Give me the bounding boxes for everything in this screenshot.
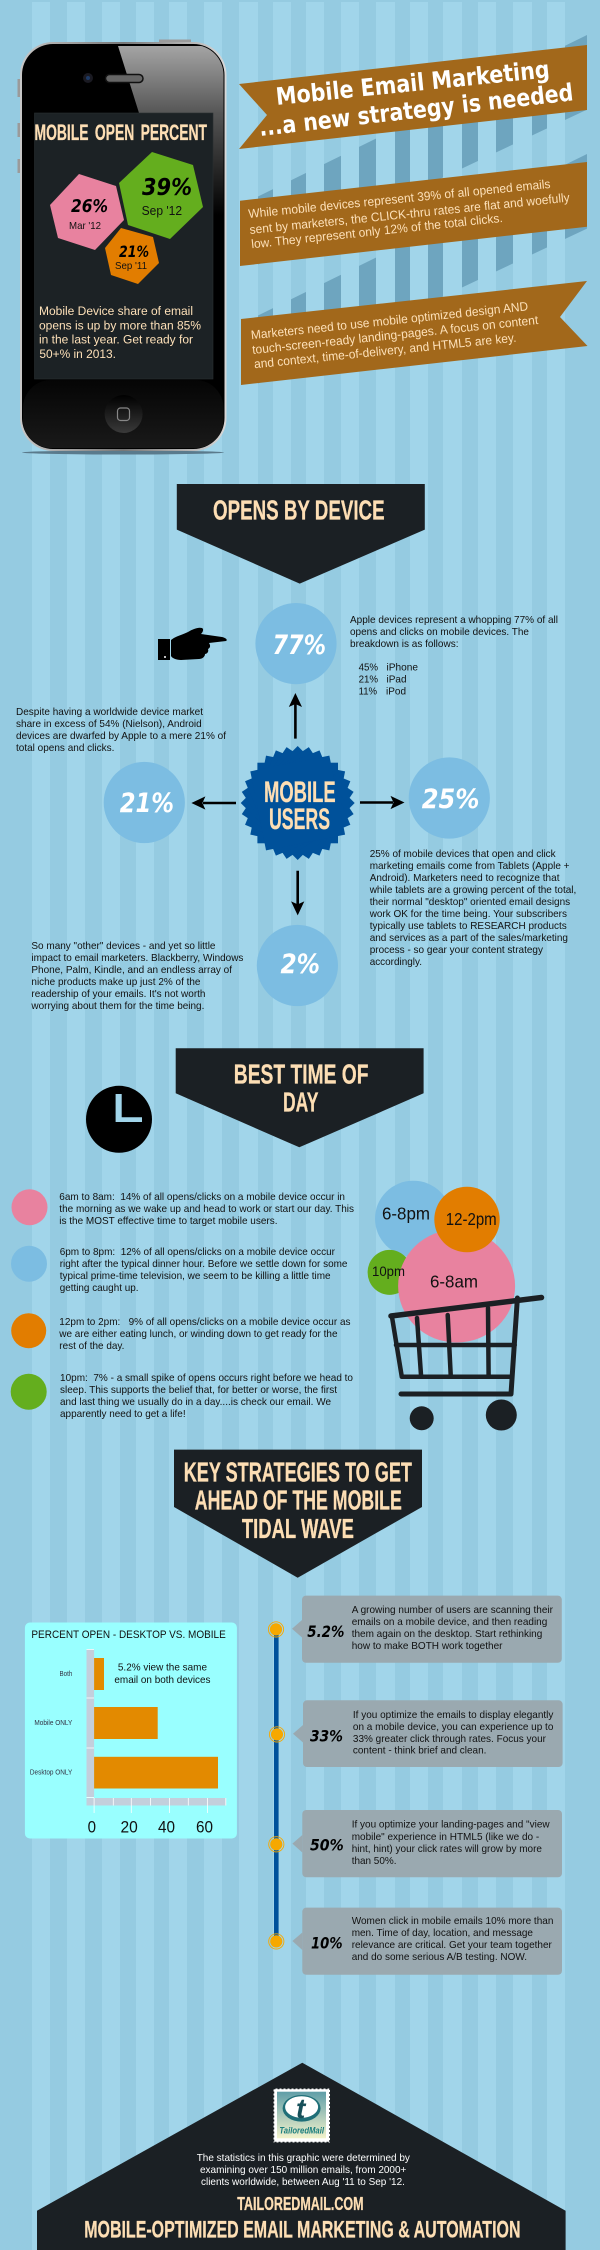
text: apple devices: 21% [359, 674, 378, 686]
bar labels: Desktop ONLY [30, 1770, 73, 1777]
stat circle: 2%: 2% [280, 949, 320, 980]
ribbon: title [239, 45, 587, 149]
text: apple devices: iPhone [386, 662, 418, 674]
text: other devices: niche products make up just 2% of the [31, 976, 201, 988]
hexagon: 21%: Sep '11 [115, 260, 147, 272]
axis numbers: 60 [196, 1819, 213, 1837]
heading: best time of day: BEST TIME OF [234, 1058, 368, 1089]
heading: key strategies [174, 1450, 422, 1578]
text: android: devices are dwarfed by Apple to a mere 21% of [16, 730, 226, 742]
badge: mobile users: USERS [269, 803, 330, 836]
callout: 33% [293, 1700, 563, 1767]
legend dot: 6-8pm [11, 1246, 47, 1282]
heading: best time of day [176, 1048, 424, 1147]
hexagon: 26%: Mar '12 [69, 220, 101, 232]
text: tablets: work OK for the time being. Your subscribers [369, 908, 567, 920]
text: apple devices: Apple devices represent a whopping 77% of all [350, 614, 558, 626]
stat circle: 25%: 25% [422, 784, 480, 815]
stat circle: 77% [255, 603, 337, 684]
hexagon: 21% [105, 228, 159, 284]
callout: 10%: men. Time of day, location, and message [352, 1927, 533, 1939]
callout: 10%: Women click in mobile emails 10% more than [352, 1915, 554, 1927]
callout: 5.2%: A growing number of users are scanning their [352, 1604, 553, 1616]
text: methodology [197, 2152, 411, 2188]
text: phone body copy: 50+% in 2013. [39, 347, 116, 361]
text: tablets: while tablets are a growing percent of the total, [369, 884, 576, 896]
ribbon: optimized design copy: Marketers need to use mobile optimized design AND [250, 299, 529, 342]
hexagon: 26% [50, 174, 124, 250]
callout: 33%: content - think brief and clean. [353, 1745, 486, 1757]
text: apple devices: opens and clicks on mobile devices. The [350, 626, 529, 638]
callout: 50%: than 50%. [352, 1855, 396, 1867]
text: methodology: The statistics in this graphic were determined by [197, 2152, 411, 2164]
text: apple devices: iPod [386, 686, 406, 698]
axis numbers: 0 [88, 1819, 96, 1837]
callout: 10% [292, 1908, 562, 1975]
callout: 33%: 33% [310, 1726, 343, 1745]
callout: 33%: If you optimize the emails to display elegantly [353, 1709, 554, 1721]
callout: 10%: and do some serious A/B testing. NOW. [352, 1951, 527, 1963]
icon: tailoredmail stamp: t [296, 2093, 307, 2124]
text: 10pm: apparently need to get a life! [60, 1408, 186, 1420]
text: other devices: So many "other" devices - and yet so little [31, 940, 216, 952]
ribbon shadows [257, 35, 587, 384]
hexagon: 26%: 26% [71, 197, 108, 217]
text: 6pm to 8pm: right after the typical dinner hour. Before we settle down for some [60, 1258, 348, 1270]
bubbles and shopping cart [368, 1181, 542, 1430]
text: tablets: accordingly. [370, 956, 422, 968]
callout: 5.2% [292, 1596, 562, 1663]
text: android: total opens and clicks. [16, 742, 114, 754]
axis numbers: 20 [120, 1819, 138, 1837]
callout: 33%: 33% greater click through rates. Focus your [353, 1733, 546, 1745]
text: 10pm [60, 1372, 353, 1420]
text: tablets: Android). Marketers need to recognize that [370, 872, 560, 884]
chart axes [86, 1649, 226, 1813]
text: 10pm: sleep. This supports the belief that, for better or worse, the first [60, 1384, 337, 1396]
text: apple devices: 11% [359, 686, 377, 698]
text: android [16, 706, 226, 754]
text: 12pm to 2pm: we are either eating lunch, or winding down to get ready for the [58, 1328, 338, 1340]
bubbles and shopping cart: 6-8pm [382, 1203, 430, 1223]
text: tablets: typically use tablets to RESEARCH products [370, 920, 567, 932]
text: apple devices: 45% [359, 662, 378, 674]
text: apple devices: iPad [386, 674, 407, 686]
text: 10pm: and last thing we usually do in a day....is check our email. We [60, 1396, 331, 1408]
text: android: Despite having a worldwide device market [16, 706, 203, 718]
text: 12pm to 2pm: 12pm to 2pm: 9% of all opens/clicks on a mobile device occur as [59, 1316, 351, 1328]
text: phone body copy [39, 304, 201, 361]
text: tablets [369, 848, 576, 968]
screen [34, 113, 213, 379]
panel: bar chart [25, 1622, 237, 1838]
ribbon: click-thru copy: low. They represent only 12% of the total clicks. [251, 211, 503, 251]
icon: tailoredmail stamp [274, 2088, 330, 2142]
text: 6am to 8am: is the MOST effective time to target mobile users. [59, 1215, 277, 1227]
bar annotation: email on both devices [114, 1674, 210, 1686]
badge: mobile users [241, 746, 355, 860]
legend dot: 6-8am [12, 1189, 48, 1225]
hexagon: 21%: 21% [119, 242, 149, 261]
text: tailoredmail.com: TAILOREDMAIL.COM [237, 2193, 364, 2214]
text: 6am to 8am: 6am to 8am: 14% of all opens/clicks on a mobile device occur in [59, 1191, 345, 1203]
text: phone body copy: in the last year. Get ready for [39, 333, 193, 347]
ribbon: optimized design copy: touch-screen-ready landing-pages. A focus on content [251, 313, 539, 357]
text: apple devices: breakdown is as follows: [350, 638, 458, 650]
text: other devices [30, 940, 243, 1012]
icon: tailoredmail stamp: TailoredMail [279, 2125, 324, 2135]
icon: pointing hand [158, 628, 227, 660]
text: 10pm: 10pm: 7% - a small spike of opens occurs right before we head to [60, 1372, 353, 1384]
text: tablets: 25% of mobile devices that open and click [370, 848, 556, 860]
text: tablets: and services as a part of the sales/marketing [370, 932, 568, 944]
bubbles and shopping cart: 10pm [372, 1263, 405, 1279]
text: 12pm to 2pm [58, 1316, 351, 1352]
bar labels: Mobile ONLY [34, 1720, 73, 1727]
callout: 50% [292, 1810, 562, 1877]
bar annotation: 5.2% view the same [118, 1662, 207, 1674]
text: 6am to 8am: the morning as we wake up and head to work or start our day. This [59, 1203, 354, 1215]
text: phone body copy: Mobile Device share of email [39, 304, 193, 318]
text: tablets: process - so gear your content strategy [370, 944, 544, 956]
bar annotation [114, 1662, 210, 1686]
heading: best time of day: DAY [283, 1087, 319, 1118]
text: tablets: marketing emails come from Tablets (Apple + [370, 860, 570, 872]
text: android: share in excess of 54% (Nielson), Android [16, 718, 202, 730]
text: methodology: clients worldwide, between Aug '11 to Sep '12. [201, 2176, 405, 2188]
text: 6pm to 8pm: 6pm to 8pm: 12% of all opens/clicks on a mobile device occur [60, 1246, 335, 1258]
heading: key strategies: AHEAD OF THE MOBILE [195, 1485, 402, 1516]
ribbon: optimized design copy: and context, time-of-delivery, and HTML5 are key. [253, 331, 517, 371]
bars [94, 1658, 218, 1788]
text: other devices: readership of your emails. It's not worth [31, 988, 206, 1000]
text: 6pm to 8pm [60, 1246, 348, 1294]
bar labels: Both [60, 1671, 72, 1678]
callout: 10%: 10% [311, 1934, 342, 1953]
callout: 33%: on a mobile device, you can experience up to [353, 1721, 554, 1733]
hexagon: 39%: Sep '12 [142, 203, 182, 218]
callout: 50%: mobile" experience in HTML5 (like we do - [352, 1831, 540, 1843]
stat circle: 25% [409, 757, 490, 839]
heading: key strategies: KEY STRATEGIES TO GET [184, 1456, 412, 1487]
ribbon: click-thru copy: sent by marketers, the CLICK-thru rates are flat and woefully [249, 190, 571, 237]
legend dot: 12-2pm [11, 1313, 46, 1348]
text: 6pm to 8pm: getting caught up. [60, 1282, 139, 1294]
bubbles and shopping cart: 12-2pm [446, 1209, 497, 1229]
stat circle: 77%: 77% [272, 630, 326, 661]
ribbon: optimized design copy [241, 281, 588, 385]
stat circle: 21% [104, 762, 185, 843]
text: 6am to 8am [59, 1191, 354, 1227]
icon: shopping cart [391, 1298, 542, 1430]
callout: 5.2%: how to make BOTH work together [352, 1640, 503, 1652]
chart title: PERCENT OPEN - DESKTOP VS. MOBILE [31, 1629, 226, 1641]
text: other devices: worrying about them for the time being. [30, 1000, 204, 1012]
icon: camera [83, 73, 93, 83]
text: other devices: Phone, Palm, Kindle, and an endless array of [31, 964, 232, 976]
heading: key strategies: TIDAL WAVE [242, 1513, 354, 1544]
axis numbers [88, 1819, 213, 1837]
hexagon: 39%: 39% [142, 175, 192, 201]
bubbles and shopping cart: 6-8am [430, 1272, 478, 1292]
badge: mobile users: MOBILE [264, 776, 336, 809]
callout: 5.2%: 5.2% [307, 1622, 344, 1641]
callout: 50%: hint, hint) your click rates will grow by more [352, 1843, 542, 1855]
axis numbers: 40 [158, 1819, 175, 1837]
panel: footer [37, 2063, 566, 2250]
heading: mobile open percent: MOBILE OPEN PERCENT [34, 120, 207, 145]
icon: speaker [106, 74, 143, 82]
stat circle: 2% [257, 925, 338, 1006]
callout: 10%: relevance are critical. Get your team together [352, 1939, 552, 1951]
callout: 50%: 50% [310, 1836, 344, 1854]
hexagon: 39% [119, 152, 203, 239]
callout: 5.2%: them again on the desktop. Start rethinking [352, 1628, 542, 1640]
ribbon: title: Mobile Email Marketing [274, 55, 551, 111]
bar labels [30, 1671, 73, 1777]
text: phone body copy: opens is up by more than 85% [39, 318, 201, 332]
stat circle: 21%: 21% [120, 788, 174, 819]
ribbon: click-thru copy [240, 162, 587, 266]
callout: 5.2%: emails on a mobile device, and then reading [352, 1616, 547, 1628]
text: 12pm to 2pm: rest of the day. [59, 1340, 124, 1352]
legend dot: 10pm [11, 1374, 47, 1410]
timeline [268, 1622, 285, 1949]
text: other devices: impact to email marketers. Blackberry, Windows [31, 952, 243, 964]
text: apple devices [350, 614, 558, 698]
text: methodology: examining over 150 million emails, from 2000+ [200, 2164, 406, 2176]
heading: opens by device [177, 484, 425, 584]
panel: phone [18, 40, 226, 454]
ribbon: click-thru copy: While mobile devices represent 39% of all opened emails [248, 177, 551, 221]
heading: opens by device: OPENS BY DEVICE [213, 494, 385, 525]
icon: home button [105, 395, 143, 433]
icon: clock [86, 1086, 152, 1153]
arrows [191, 693, 404, 915]
callout: 50%: If you optimize your landing-pages and "view [352, 1819, 550, 1831]
text: 6pm to 8pm: typical prime-time television, we seem to be killing a little time [60, 1270, 331, 1282]
text: tablets: their normal "desktop" oriented email designs [370, 896, 570, 908]
